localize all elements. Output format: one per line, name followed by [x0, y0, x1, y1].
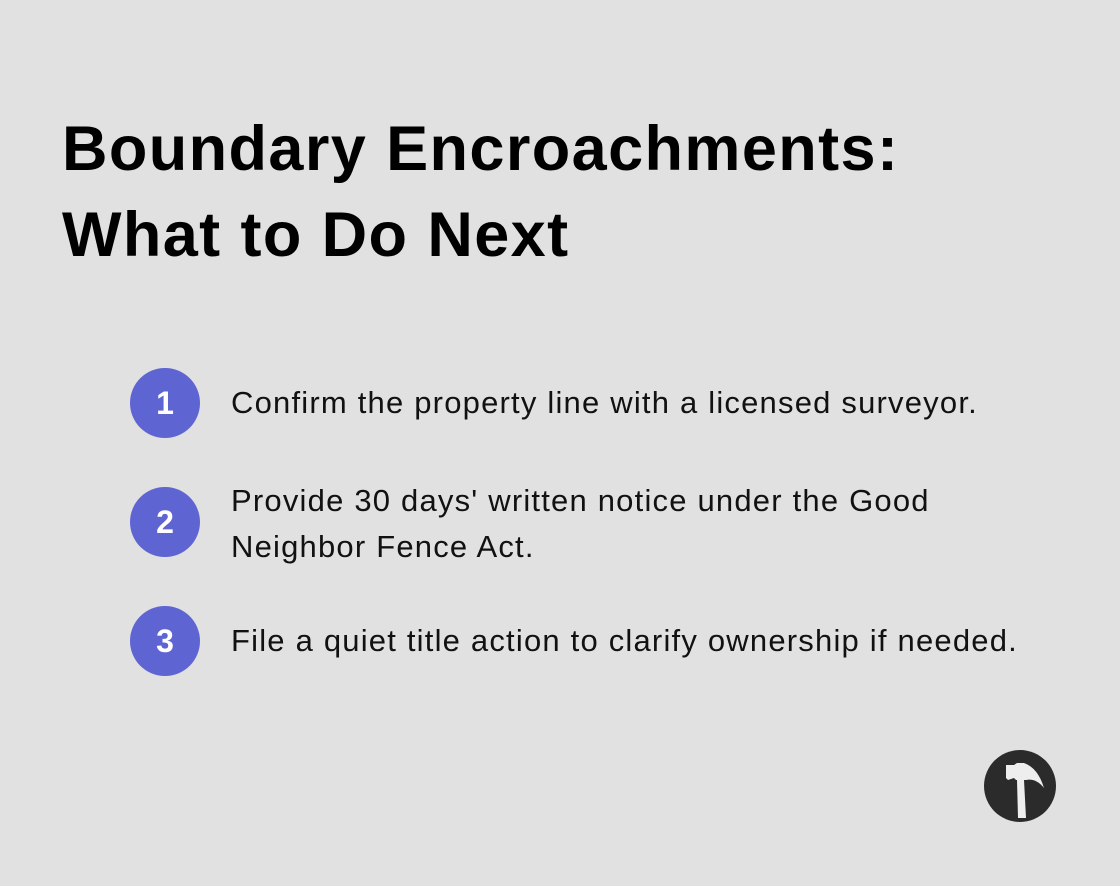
icon: hammer logo [984, 750, 1056, 822]
step 2 text: Neighbor Fence Act. [231, 529, 535, 564]
step 1 [130, 368, 978, 438]
step 2 [130, 483, 930, 564]
title: Boundary Encroachments: [62, 114, 899, 184]
number badge 1: 1 [156, 385, 174, 421]
step 2 text: Provide 30 days' written notice under the Good [231, 483, 930, 518]
step 1 text: Confirm the property line with a licensed surveyor. [231, 385, 978, 420]
step 2 text [231, 483, 930, 564]
title [62, 114, 899, 270]
step 3 text: File a quiet title action to clarify ownership if needed. [231, 623, 1018, 658]
number badge 3: 3 [156, 623, 174, 659]
number badge 3 [130, 606, 200, 676]
number badge 1 [130, 368, 200, 438]
number badge 2: 2 [156, 504, 174, 540]
title: What to Do Next [62, 200, 569, 270]
step 3 [130, 606, 1018, 676]
number badge 2 [130, 487, 200, 557]
